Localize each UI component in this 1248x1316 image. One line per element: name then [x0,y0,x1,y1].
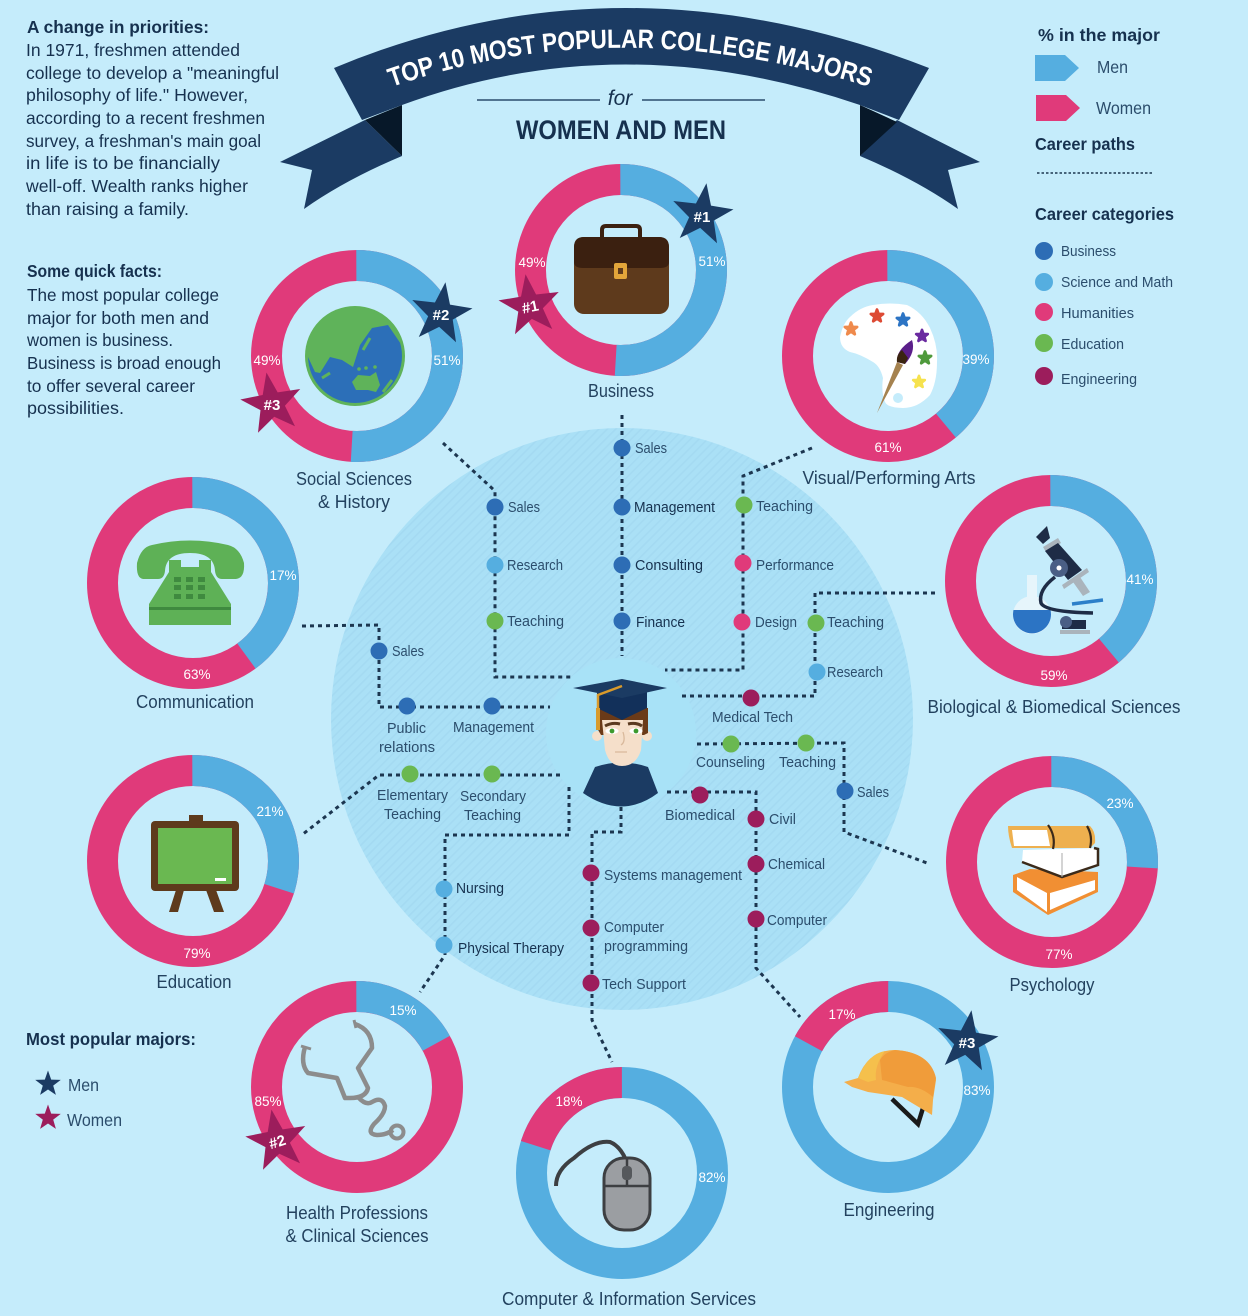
donut: communication: Communication [136,692,254,712]
icon: telephone [137,540,244,625]
icon: stethoscope [301,1020,404,1138]
donut: social sciences: & History [318,492,390,512]
student backdrop circle [546,658,696,808]
computer services paths: programming [604,938,688,955]
star: men #1 business: #1 [694,209,710,226]
donut: computer and information services: Computer & Information Services [502,1289,756,1309]
donut: education: Education [156,972,232,992]
education paths [377,766,526,824]
health paths [436,880,564,957]
legend: career categories: Education [1061,336,1124,353]
donut: computer and information services: 18% [555,1094,583,1109]
social sciences paths: Teaching [507,613,564,630]
communication paths: Sales [392,643,424,660]
computer services paths: Systems management [604,867,743,884]
icon: briefcase [574,226,669,314]
donut: social sciences: 51% [433,353,461,368]
legend: career categories [1035,204,1174,388]
legend: percent in the major: Men [1097,57,1128,77]
legend: most popular majors: Most popular majors: [26,1029,196,1049]
health paths: Physical Therapy [458,940,564,957]
donut: social sciences: Social Sciences [296,469,412,489]
donut: engineering [765,964,1011,1220]
legend: career categories: Business [1061,243,1116,260]
donut: biological sciences: 59% [1040,668,1068,683]
donut: psychology: 77% [1045,947,1073,962]
communication paths: relations [379,739,435,756]
engineering paths: Biomedical [665,807,735,824]
business paths: Consulting [635,557,703,574]
donut: communication [102,492,297,712]
legend: most popular majors: Women [67,1110,122,1130]
donut: computer and information services: 82% [698,1170,726,1185]
business paths: Finance [636,614,685,631]
star: men #1 business [668,179,737,245]
subtitle: for [608,87,633,110]
text block: quick facts: major for both men and [27,308,209,328]
text block: change in priorities: according to a recent freshmen [26,108,265,128]
text block: quick facts: to offer several career [27,376,195,396]
donut: health professions: Health Professions [286,1203,428,1223]
donut: social sciences: 49% [253,353,281,368]
star: men #2 social sciences [407,278,476,344]
donut: communication: 63% [183,667,211,682]
visual arts paths [734,496,834,631]
psychology paths: Sales [857,784,889,801]
icon: books [1008,825,1098,915]
social sciences paths [486,498,564,630]
visual arts paths: Performance [756,557,834,574]
legend: percent in the major: Women [1096,98,1151,118]
donut: business [518,180,726,401]
star: women #1 business [495,270,564,336]
social sciences paths: Sales [508,499,540,516]
donut: biological sciences [928,490,1180,717]
subtitle: WOMEN AND MEN [516,115,726,145]
icon: student [573,679,667,806]
donut: engineering: 17% [828,1007,856,1022]
business paths: Management [634,499,716,516]
text block: change in priorities: in life is to be financially [26,153,220,173]
donut: social sciences [253,266,461,512]
legend: career categories: Science and Math [1061,274,1173,291]
career nodes and labels [370,440,889,993]
text block: change in priorities [25,17,279,219]
engineering paths: Computer [767,912,827,929]
donut: engineering: Engineering [844,1200,934,1220]
subtitle [477,87,765,145]
donut: psychology: Psychology [1010,975,1094,995]
engineering paths: Civil [769,811,796,828]
education paths: Teaching [384,806,441,823]
star: men #2 social sciences: #2 [433,307,449,324]
banner title text: TOP 10 MOST POPULAR COLLEGE MAJORS [386,30,872,86]
computer services paths [582,864,743,993]
psychology paths [696,734,889,801]
legend: career paths: Career paths [1035,134,1135,154]
text block: quick facts: The most popular college [27,285,219,305]
psychology paths: Counseling [696,754,765,771]
business paths: Sales [635,440,667,457]
biological sciences paths: Teaching [827,614,884,631]
icon: chalkboard [151,815,239,912]
donut: business: 49% [518,255,546,270]
donut: communication: 17% [269,568,297,583]
computer services paths: Tech Support [602,976,687,993]
central hatched circle [331,428,913,1010]
star: women #3 social sciences [237,367,306,435]
text block: change in priorities: than raising a family. [26,199,189,219]
legend: career paths [1035,134,1152,173]
donut: business: Business [588,381,654,401]
donut: psychology: 23% [1106,796,1134,811]
text block: change in priorities: philosophy of life." However, [26,85,248,105]
text block: quick facts: possibilities. [27,398,124,418]
text block: quick facts: Business is broad enough [27,353,221,373]
icon: palette [840,304,937,413]
visual arts paths: Teaching [756,498,813,515]
communication paths: Management [453,719,535,736]
star: women #2 health [242,1104,311,1172]
star: women #2 health: #2 [267,1132,288,1153]
legend: percent in the major: % in the major [1038,25,1160,45]
text block: quick facts [26,261,221,418]
communication paths: Public [387,720,426,737]
icon: hard hat [844,1050,936,1124]
donut: biological sciences: Biological & Biomedical Sciences [928,697,1180,717]
stars: rank badges [237,179,1002,1172]
icon: computer mouse [556,1142,650,1230]
icon: globe [300,306,405,410]
biological sciences paths [712,614,884,726]
donut: visual arts: 61% [874,440,902,455]
text block: change in priorities: In 1971, freshmen attended [26,40,240,60]
text block: quick facts: Some quick facts: [27,261,162,281]
legend: career categories: Engineering [1061,371,1137,388]
text block: quick facts: women is business. [26,330,173,350]
star: women #1 business: #1 [520,297,540,318]
donut: education [102,770,284,992]
text block: change in priorities: college to develop a "meaningful [26,63,279,83]
legend: most popular majors: Men [68,1075,99,1095]
donut: health professions [254,996,448,1246]
star: men #3 engineering: #3 [959,1035,975,1052]
title banner [280,8,980,209]
donut: education: 79% [183,946,211,961]
biological sciences paths: Research [827,664,883,681]
text block: change in priorities: survey, a freshman's main goal [26,131,261,151]
donut: psychology [962,772,1142,995]
career path dotted lines [302,415,935,1062]
engineering paths: Chemical [768,856,825,873]
social sciences paths: Research [507,557,563,574]
visual arts paths: Design [755,614,797,631]
donut: business: 51% [698,254,726,269]
education paths: Secondary [460,788,526,805]
legend: percent in the major [1035,25,1160,121]
business paths [614,440,716,631]
legend: most popular majors [26,1029,196,1130]
donut: visual arts: Visual/Performing Arts [802,468,976,488]
donut: biological sciences: 41% [1126,572,1154,587]
communication paths [370,642,535,756]
donut: health professions: 85% [254,1094,282,1109]
biological sciences paths: Medical Tech [712,709,793,726]
donut: engineering: 83% [963,1083,991,1098]
star: women #3 social sciences: #3 [264,397,280,414]
donut: visual arts [798,266,990,488]
icon: microscope and flask [1013,526,1103,634]
engineering paths [665,786,827,929]
legend: career categories: Humanities [1061,305,1134,322]
computer services paths: Computer [604,919,664,936]
donut: health professions: 15% [389,1003,417,1018]
donut: visual arts: 39% [962,352,990,367]
text block: change in priorities: A change in priorities: [27,17,209,37]
education paths: Teaching [464,807,521,824]
star: men #3 engineering [933,1006,1002,1072]
psychology paths: Teaching [779,754,836,771]
education paths: Elementary [377,787,448,804]
health paths: Nursing [456,880,504,897]
donut: education: 21% [256,804,284,819]
donut: health professions: & Clinical Sciences [286,1226,428,1246]
donut: computer and information services [502,1059,756,1309]
text block: change in priorities: well-off. Wealth ranks higher [25,176,248,196]
legend: career categories: Career categories [1035,204,1174,224]
